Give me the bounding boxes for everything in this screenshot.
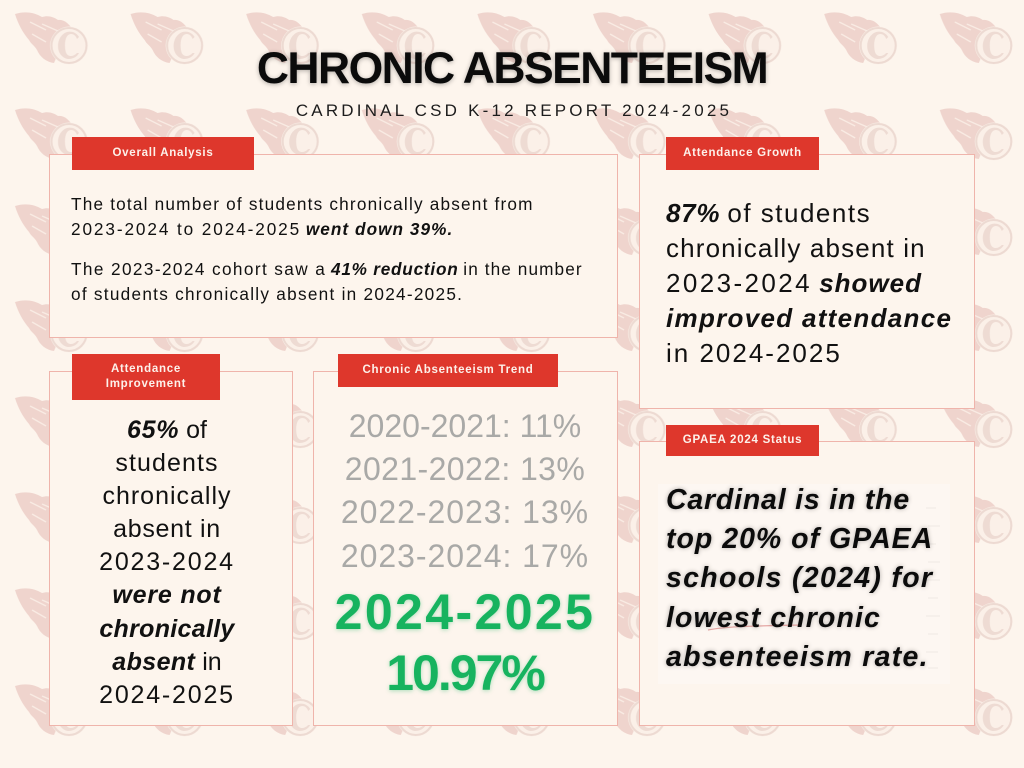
tab: attendance improvement: Improvement xyxy=(106,378,186,390)
attendance growth text: chronically absent in xyxy=(666,233,926,263)
title: CHRONIC ABSENTEEISM xyxy=(257,44,767,93)
tab: attendance growth: Attendance Growth xyxy=(683,147,802,159)
prior year rates: 2023-2024: 17% xyxy=(341,538,589,574)
tab: GPAEA status xyxy=(666,425,819,456)
attendance improvement text: absent in xyxy=(113,515,221,543)
cohort text: The 2023-2024 cohort saw a 41% reduction in the number xyxy=(71,259,583,279)
current year rate: 10.97% xyxy=(386,645,544,701)
panel: attendance improvement xyxy=(49,371,293,726)
tab: overall analysis xyxy=(72,137,254,170)
overall analysis text xyxy=(71,194,534,238)
attendance improvement text xyxy=(99,416,236,709)
prior year rates xyxy=(341,408,589,574)
cohort text: of students chronically absent in 2024-2025. xyxy=(71,284,463,304)
panel: overall analysis xyxy=(49,154,618,338)
attendance improvement text: were not xyxy=(112,581,222,609)
attendance improvement text: 2023-2024 xyxy=(99,548,235,576)
GPAEA status text: schools (2024) for xyxy=(666,562,933,594)
tab: attendance growth xyxy=(666,137,819,170)
tab: GPAEA status: GPAEA 2024 Status xyxy=(683,434,802,446)
attendance improvement text: chronically xyxy=(99,615,235,643)
attendance improvement text: 2024-2025 xyxy=(99,681,235,709)
panel: chronic absenteeism trend xyxy=(313,371,618,726)
tab: chronic absenteeism trend: Chronic Absenteeism Trend xyxy=(362,364,534,376)
attendance growth text xyxy=(666,198,952,368)
prior year rates: 2022-2023: 13% xyxy=(341,494,589,530)
prior year rates: 2021-2022: 13% xyxy=(345,451,585,487)
attendance growth text: 2023-2024 showed xyxy=(666,268,922,298)
attendance improvement text: chronically xyxy=(102,482,232,510)
tab: attendance improvement xyxy=(72,354,220,400)
GPAEA status text: Cardinal is in the xyxy=(666,484,910,516)
faint chart backdrop xyxy=(708,508,940,668)
tab: attendance improvement: Attendance xyxy=(111,363,181,375)
attendance improvement text: 65% of xyxy=(127,416,207,444)
panel: GPAEA status xyxy=(639,441,975,726)
current year rate xyxy=(334,584,595,701)
current year rate: 2024-2025 xyxy=(335,584,595,640)
tab: overall analysis: Overall Analysis xyxy=(112,147,214,159)
GPAEA status text: absenteeism rate. xyxy=(666,641,929,673)
tab: chronic absenteeism trend xyxy=(338,354,558,387)
panel: attendance growth xyxy=(639,154,975,409)
attendance growth text: in 2024-2025 xyxy=(666,338,842,368)
overall analysis text: 2023-2024 to 2024-2025 went down 39%. xyxy=(71,218,453,238)
GPAEA status text: top 20% of GPAEA xyxy=(666,523,933,555)
attendance improvement text: students xyxy=(115,449,219,477)
attendance growth text: improved attendance xyxy=(666,303,952,333)
subtitle: CARDINAL CSD K-12 REPORT 2024-2025 xyxy=(296,101,732,120)
prior year rates: 2020-2021: 11% xyxy=(349,408,581,444)
cohort text xyxy=(71,259,583,304)
GPAEA status text xyxy=(664,484,935,673)
GPAEA status text: lowest chronic xyxy=(666,602,881,634)
attendance improvement text: absent in xyxy=(112,648,222,676)
overall analysis text: The total number of students chronically absent from xyxy=(71,194,534,214)
attendance growth text: 87% of students xyxy=(666,198,871,228)
